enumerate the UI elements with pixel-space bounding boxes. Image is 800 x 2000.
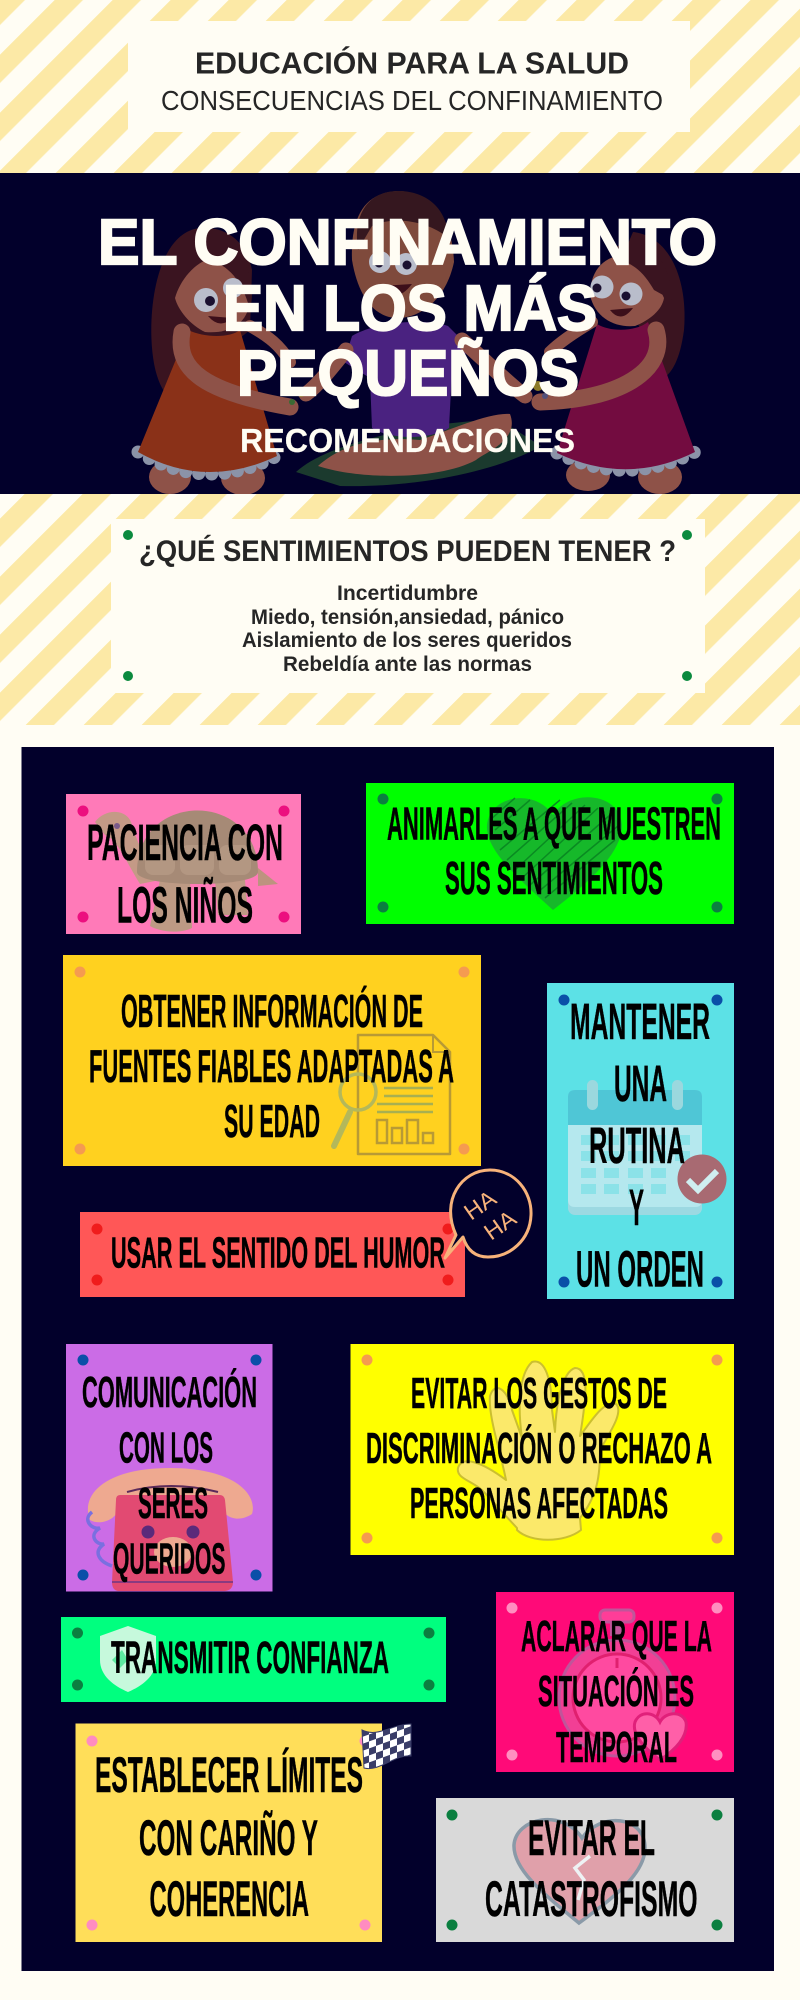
corner dots — [362, 1354, 722, 1544]
striped middle background — [0, 494, 800, 725]
main title: EN LOS MÁS — [223, 272, 597, 344]
corner dots — [74, 966, 470, 1154]
feelings list: Rebeldía ante las normas — [283, 653, 532, 676]
corner dots — [78, 1354, 262, 1580]
card text: LOS NIÑOS — [117, 876, 253, 934]
icon: HA HA speech bubble: HA — [459, 1184, 501, 1225]
banner: navy with children — [0, 173, 800, 495]
card: avoid discrimination — [350, 1344, 734, 1555]
card: set limits: ESTABLECER LÍMITES — [95, 1747, 363, 1803]
card: patience: PACIENCIA CON — [87, 814, 283, 871]
card text — [485, 1810, 698, 1927]
card: show feelings — [366, 783, 734, 924]
boy — [306, 191, 525, 476]
card text — [570, 993, 710, 1298]
feelings list: Aislamiento de los seres queridos — [242, 629, 572, 652]
icon: shield — [100, 1626, 156, 1692]
card text: CON CARIÑO Y — [139, 1810, 318, 1866]
card text: Y — [629, 1179, 644, 1236]
icon: document and magnifier — [334, 1035, 450, 1154]
card text: TRANSMITIR CONFIANZA — [111, 1632, 389, 1683]
icon: checkered flag — [362, 1724, 411, 1769]
corner dots — [92, 1224, 454, 1286]
card text: SERES — [138, 1479, 208, 1528]
icon: telephone — [88, 1468, 253, 1591]
panel: navy recommendations board — [22, 747, 774, 1971]
icon: scribbled heart — [487, 797, 622, 910]
panel: feelings — [111, 519, 705, 693]
header card — [128, 21, 690, 132]
corner dots — [558, 994, 722, 1288]
corner dots — [378, 794, 722, 912]
icon: calendar with check — [568, 1080, 726, 1215]
main title: PEQUEÑOS — [237, 337, 579, 409]
corner dots — [78, 806, 290, 922]
card text — [387, 798, 721, 904]
card text: OBTENER INFORMACIÓN DE — [121, 985, 423, 1037]
card: sense of humour — [80, 1170, 531, 1297]
mat — [296, 420, 541, 486]
icon: HA HA speech bubble — [445, 1170, 531, 1258]
card: communication — [66, 1344, 272, 1592]
card text — [87, 814, 283, 934]
card: temporary situation — [496, 1592, 734, 1772]
card text: CON LOS — [119, 1424, 213, 1472]
card text: SU EDAD — [224, 1095, 320, 1147]
heading: education: EDUCACIÓN PARA LA SALUD — [195, 44, 629, 80]
card text: EVITAR EL — [528, 1810, 655, 1866]
question heading: ¿QUÉ SENTIMIENTOS PUEDEN TENER ? — [139, 534, 676, 568]
icon: broken heart — [514, 1820, 645, 1923]
card text: TEMPORAL — [556, 1723, 677, 1772]
corner dots — [123, 530, 692, 681]
card: routine — [547, 983, 734, 1299]
feelings list: Miedo, tensión,ansiedad, pánico — [251, 606, 564, 629]
card: communication: COMUNICACIÓN — [82, 1367, 257, 1417]
corner dots — [506, 1602, 722, 1760]
left girl — [138, 228, 306, 495]
card text: COHERENCIA — [150, 1871, 309, 1927]
corner dots — [446, 1810, 722, 1930]
striped header background — [0, 0, 800, 173]
card: patience — [66, 794, 301, 934]
right girl — [533, 232, 695, 494]
card: set limits — [76, 1724, 411, 1942]
feelings list: Incertidumbre — [337, 582, 478, 605]
card text — [89, 985, 454, 1147]
illustration: three children — [138, 191, 695, 495]
card: sense of humour: USAR EL SENTIDO DEL HUMOR — [111, 1228, 445, 1278]
icon: turtle — [95, 810, 278, 932]
feelings list — [242, 582, 572, 676]
main title — [98, 206, 717, 409]
card text — [82, 1367, 257, 1584]
corner dots — [86, 1736, 370, 1930]
icon: open hand — [458, 1362, 618, 1540]
card text: RUTINA — [589, 1117, 685, 1174]
card: avoid catastrophism — [436, 1798, 734, 1942]
icon: stopwatch with heart — [559, 1610, 686, 1760]
card text: QUERIDOS — [113, 1535, 226, 1584]
icon: HA HA speech bubble: HA — [479, 1204, 521, 1245]
card text — [521, 1612, 712, 1772]
card text — [366, 1369, 712, 1528]
subtitle: recommendations: RECOMENDACIONES — [240, 422, 575, 459]
card text — [95, 1747, 363, 1927]
card text: UNA — [614, 1055, 667, 1112]
main title: EL CONFINAMIENTO — [98, 206, 717, 278]
card: reliable information — [63, 955, 481, 1166]
card: transmit confidence — [61, 1617, 446, 1702]
subheading: consequences: CONSECUENCIAS DEL CONFINAMIENTO — [161, 85, 663, 116]
corner dots — [72, 1628, 434, 1690]
